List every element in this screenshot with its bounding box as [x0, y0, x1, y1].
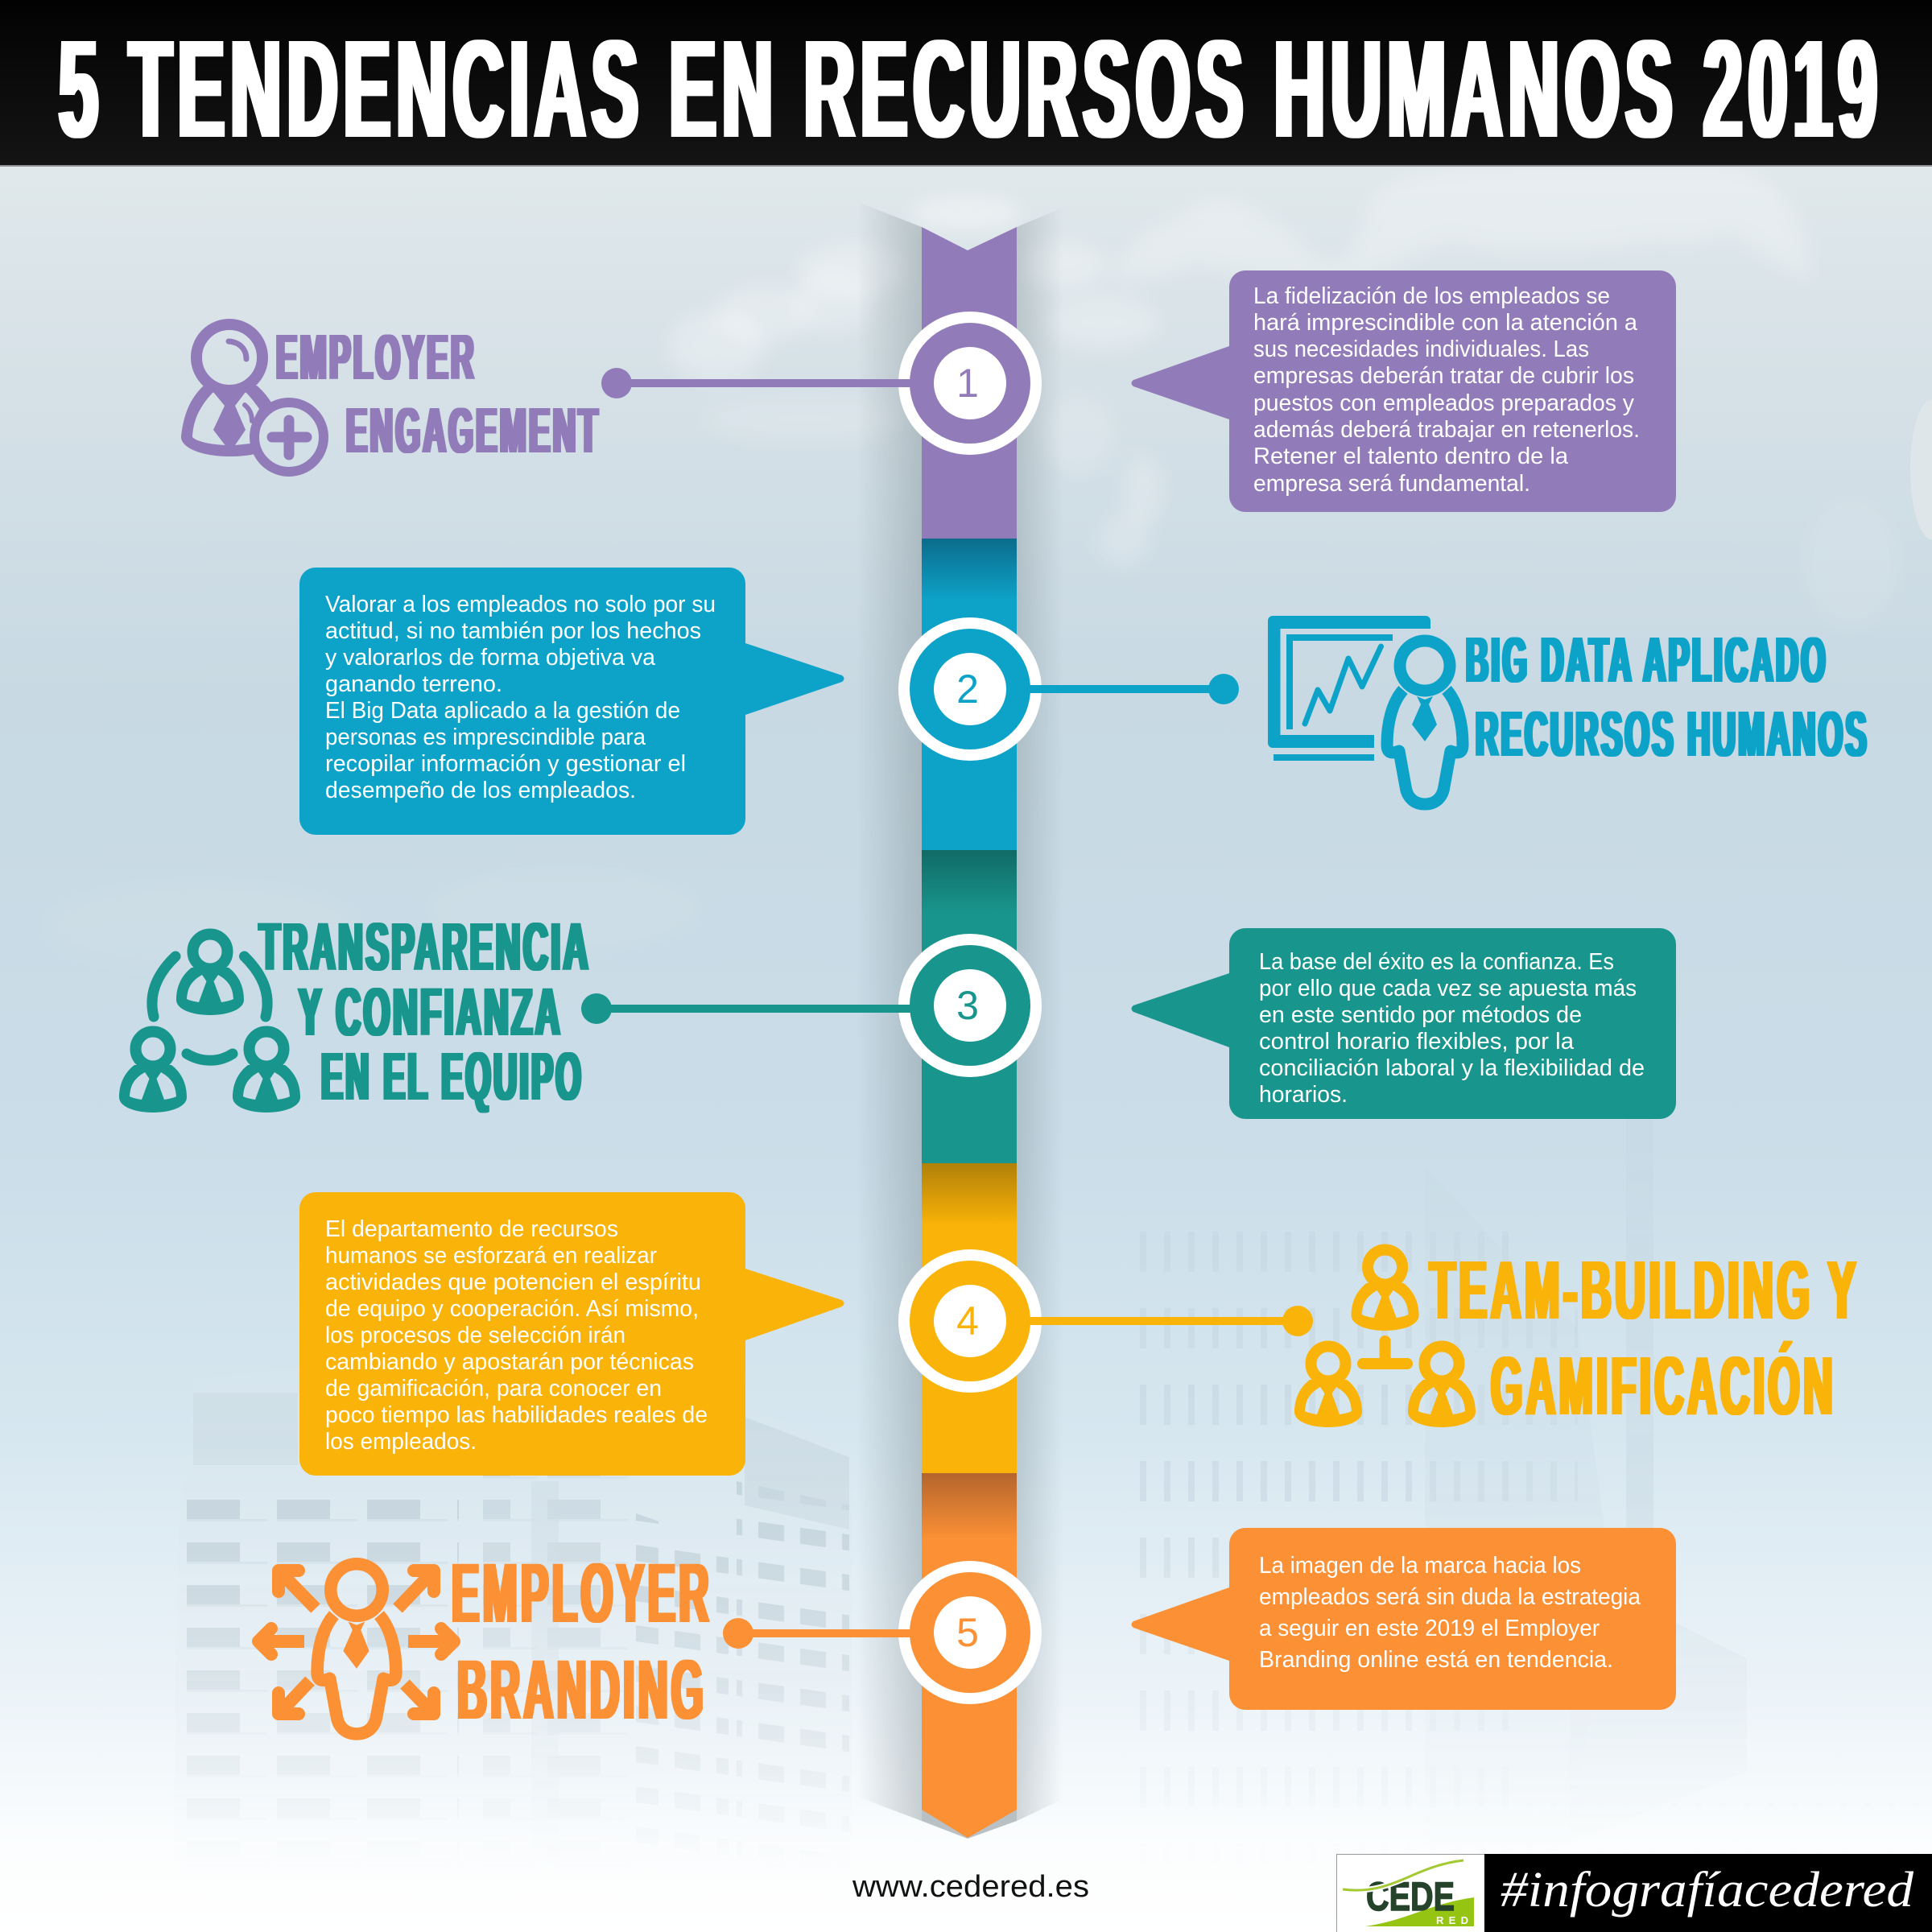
- left apartment building: [187, 1417, 849, 1800]
- callout text: cambiando y apostarán por técnicas: [325, 1349, 694, 1375]
- number badge 2: [904, 623, 1036, 755]
- callout text: La imagen de la marca hacia los: [1259, 1553, 1581, 1579]
- callout text: en este sentido por métodos de: [1259, 1002, 1582, 1028]
- logo: cede red: [1336, 1855, 1484, 1932]
- text: ENGAGEMENT: [346, 394, 601, 466]
- number badge 4: [904, 1255, 1036, 1387]
- panel: team-building callout: [299, 1192, 844, 1476]
- connector 5: [723, 1618, 914, 1649]
- callout text: a seguir en este 2019 el Employer: [1259, 1616, 1600, 1641]
- icon: team hierarchy: [1294, 1249, 1476, 1427]
- number badge 1: [904, 317, 1036, 449]
- connector 4: [1026, 1306, 1313, 1336]
- callout text: actividades que potencien el espíritu: [325, 1269, 701, 1295]
- clouds: [40, 165, 1900, 974]
- heading: employer engagement: [276, 321, 601, 466]
- hashtag banner: #infografíacedered: [1501, 1863, 1914, 1918]
- callout text: poco tiempo las habilidades reales de: [325, 1402, 708, 1428]
- number badge 5: 5: [956, 1610, 979, 1655]
- callout text: empresas deberán tratar de cubrir los: [1253, 363, 1634, 389]
- callout text: empresa será fundamental.: [1253, 471, 1530, 497]
- heading: employer branding: [452, 1546, 712, 1737]
- heading: transparencia y confianza en el equipo: Y CONFIANZA: [299, 974, 563, 1050]
- text: EMPLOYER: [452, 1546, 712, 1641]
- number badge 5: [904, 1567, 1036, 1699]
- callout text: por ello que cada vez se apuesta más: [1259, 976, 1637, 1001]
- number badge 1: 1: [956, 361, 979, 406]
- heading: transparencia y confianza en el equipo: [259, 909, 591, 1114]
- callout text: [1259, 1553, 1641, 1673]
- callout text: además deberá trabajar en retenerlos.: [1253, 417, 1640, 443]
- heading: big data aplicado recursos humanos: [1466, 624, 1869, 770]
- panel: employer branding callout: [1132, 1528, 1676, 1710]
- central timeline ribbon: [856, 201, 1063, 1839]
- heading: transparencia y confianza en el equipo: TRANSPARENCIA: [259, 909, 591, 985]
- callout text: personas es imprescindible para: [325, 724, 646, 750]
- heading: employer engagement: EMPLOYER: [276, 321, 477, 393]
- icon: employee with plus sign: [181, 324, 324, 472]
- segment 4 yellow: [922, 1163, 1017, 1474]
- panel: transparency callout: [1132, 928, 1676, 1119]
- right building and crane: [1140, 1385, 1653, 1654]
- callout text: los procesos de selección irán: [325, 1323, 625, 1348]
- callout text: [1259, 949, 1645, 1108]
- callout text: Valorar a los empleados no solo por su: [325, 592, 716, 617]
- callout text: La fidelización de los empleados se: [1253, 283, 1610, 309]
- callout text: [1253, 283, 1640, 497]
- ribbon shadow: [856, 201, 1063, 1839]
- segment 5 orange: [922, 1473, 1017, 1838]
- icon: presenter with data chart: [1268, 616, 1463, 804]
- connector 1: [601, 368, 914, 398]
- number badge 2: 2: [956, 667, 979, 712]
- callout text: actitud, si no también por los hechos: [325, 618, 701, 644]
- logo: cede red: RED: [1436, 1914, 1468, 1926]
- callout text: de equipo y cooperación. Así mismo,: [325, 1296, 699, 1322]
- segment 3 green: [922, 850, 1017, 1164]
- callout text: recopilar información y gestionar el: [325, 751, 686, 777]
- connector 2: [1026, 674, 1239, 704]
- callout text: El Big Data aplicado a la gestión de: [325, 698, 680, 724]
- callout text: ganando terreno.: [325, 671, 502, 697]
- callout text: puestos con empleados preparados y: [1253, 390, 1635, 416]
- callout text: control horario flexibles, por la: [1259, 1029, 1574, 1055]
- text: EN EL EQUIPO: [321, 1038, 584, 1114]
- callout text: Retener el talento dentro de la: [1253, 444, 1568, 469]
- callout text: [325, 592, 716, 803]
- heading: team-building y gamificacion: [1430, 1244, 1860, 1432]
- callout text: empleados será sin duda la estrategia: [1259, 1584, 1641, 1610]
- callout text: hará imprescindible con la atención a: [1253, 310, 1637, 336]
- callout text: La base del éxito es la confianza. Es: [1259, 949, 1614, 975]
- callout text: El departamento de recursos: [325, 1216, 618, 1242]
- text: BRANDING: [457, 1643, 707, 1737]
- number badge 3: [904, 939, 1036, 1071]
- callout text: [325, 1216, 708, 1455]
- connector 3: [581, 993, 914, 1024]
- number badge 4: 4: [956, 1298, 979, 1344]
- website url: www.cedered.es: [852, 1870, 1089, 1904]
- number badge 3: 3: [956, 983, 979, 1028]
- callout text: los empleados.: [325, 1429, 477, 1455]
- callout text: humanos se esforzará en realizar: [325, 1243, 657, 1269]
- callout text: desempeño de los empleados.: [325, 778, 636, 803]
- person fragment at right edge: [1910, 399, 1932, 539]
- callout text: y valorarlos de forma objetiva va: [325, 645, 655, 671]
- icon: employee with outward arrows: [258, 1564, 454, 1734]
- callout text: conciliación laboral y la flexibilidad de: [1259, 1055, 1645, 1081]
- logo: cede red: CEDE: [1366, 1874, 1455, 1919]
- panel: employer engagement callout: [1132, 270, 1676, 512]
- icon: connected team: [119, 934, 300, 1113]
- callout text: Branding online está en tendencia.: [1259, 1647, 1613, 1673]
- segment 1 purple: [922, 227, 1017, 539]
- title banner: [0, 0, 1932, 167]
- panel: big data callout: [299, 568, 844, 835]
- callout text: horarios.: [1259, 1082, 1348, 1108]
- hashtag banner: [1484, 1854, 1932, 1932]
- segment 2 blue: [922, 539, 1017, 851]
- callout text: sus necesidades individuales. Las: [1253, 336, 1589, 362]
- callout text: de gamificación, para conocer en: [325, 1376, 662, 1402]
